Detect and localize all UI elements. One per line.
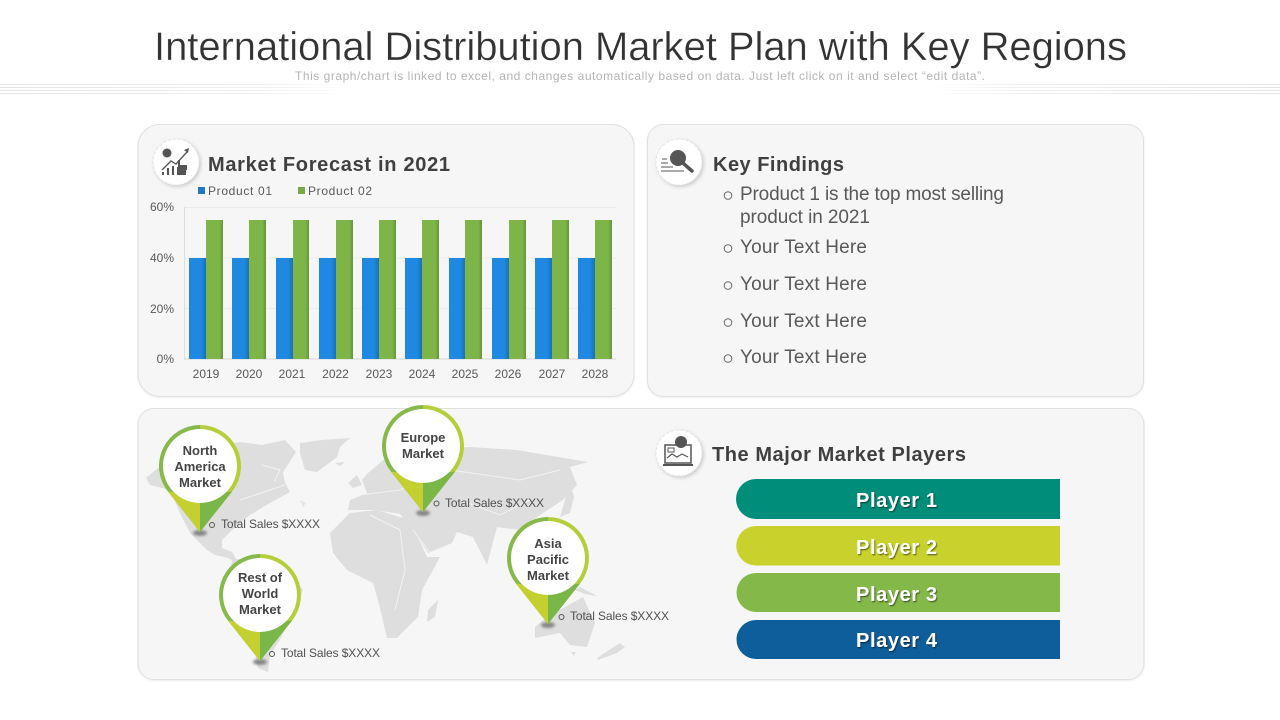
- findings list: Your Text Here: [740, 311, 867, 332]
- player bar 2: [736, 526, 1060, 566]
- map pin: asia pacific: [507, 517, 589, 628]
- icon: market players: [656, 430, 702, 476]
- chart legend: Product 01: [208, 184, 272, 198]
- bar chart: 0%: [157, 352, 174, 366]
- bar chart: 2019: [193, 367, 220, 381]
- bar chart: 2027: [539, 367, 566, 381]
- map pin: north america: America: [174, 459, 226, 474]
- map pin: europe: Market: [402, 446, 445, 461]
- panel: key findings: [648, 124, 1144, 396]
- map pin: asia pacific: Asia: [534, 536, 562, 551]
- map pin: rest of world: Rest of: [238, 570, 283, 585]
- player bar 1: Player 1: [856, 490, 937, 512]
- panel: market forecast: [138, 124, 634, 396]
- subtitle: This graph/chart is linked to excel, and changes automatically based on data. Just left click on it and select “edit data”.: [295, 69, 985, 83]
- chart legend: [198, 184, 372, 198]
- player bar 3: [736, 573, 1060, 612]
- chart legend: Product 02: [308, 184, 372, 198]
- sales labels: [210, 496, 669, 660]
- sales labels: Total Sales $XXXX: [445, 496, 544, 510]
- sales labels: Total Sales $XXXX: [281, 646, 380, 660]
- map pin: asia pacific: Pacific: [527, 552, 569, 567]
- player bar 3: Player 3: [856, 584, 937, 606]
- panel: regions and players: [138, 405, 1144, 680]
- title: International Distribution Market Plan with Key Regions: [154, 25, 1127, 69]
- findings list: Your Text Here: [740, 347, 867, 368]
- bar chart: 2026: [495, 367, 522, 381]
- world map: [146, 438, 625, 672]
- bar chart: 2021: [279, 367, 306, 381]
- sales labels: Total Sales $XXXX: [570, 609, 669, 623]
- findings list: Your Text Here: [740, 274, 867, 295]
- header decorative lines: [0, 84, 1280, 94]
- findings list: [724, 184, 1004, 368]
- heading: market players: The Major Market Players: [712, 444, 966, 466]
- icon: market forecast: [153, 139, 199, 185]
- map pin: north america: North: [183, 443, 217, 458]
- map pin: rest of world: [219, 554, 301, 665]
- bar chart: 2024: [409, 367, 436, 381]
- map pin: north america: [159, 425, 241, 536]
- map pin: rest of world: Market: [239, 602, 282, 617]
- bar chart: 40%: [150, 251, 174, 265]
- findings list: product in 2021: [740, 207, 870, 228]
- bar chart: [150, 200, 616, 381]
- map pin: europe: Europe: [401, 430, 445, 445]
- findings list: Your Text Here: [740, 237, 867, 258]
- findings list: Product 1 is the top most selling: [740, 184, 1004, 205]
- player bar 4: Player 4: [856, 630, 938, 652]
- bar chart: 2023: [366, 367, 393, 381]
- bar chart: 2020: [236, 367, 263, 381]
- bar chart: 60%: [150, 200, 174, 214]
- icon: magnifier: [656, 139, 702, 185]
- heading: key findings: Key Findings: [713, 154, 844, 176]
- bar chart: 20%: [150, 302, 174, 316]
- sales labels: Total Sales $XXXX: [221, 517, 320, 531]
- player bar 4: [736, 620, 1060, 659]
- map pin: rest of world: World: [242, 586, 278, 601]
- bar chart: 2022: [322, 367, 349, 381]
- bar chart: 2025: [452, 367, 479, 381]
- map pin: europe: [382, 405, 464, 516]
- heading: market forecast: Market Forecast in 2021: [208, 154, 450, 176]
- map pin: north america: Market: [179, 475, 222, 490]
- player bar 1: [736, 479, 1060, 519]
- map pin: asia pacific: Market: [527, 568, 570, 583]
- bar chart: 2028: [582, 367, 609, 381]
- player bar 2: Player 2: [856, 537, 937, 559]
